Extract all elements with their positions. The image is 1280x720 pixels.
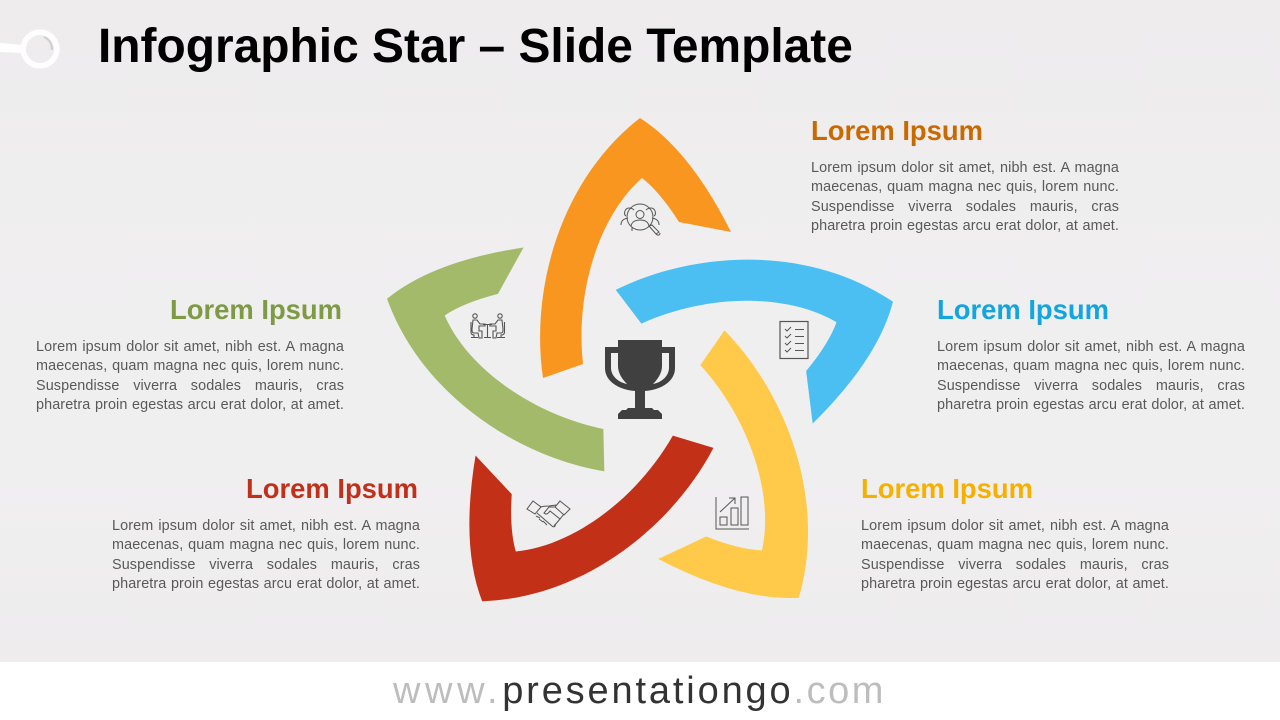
header ring ornament bbox=[0, 30, 60, 68]
body text: green: Suspendisse viverra sodales mauris, cras bbox=[36, 378, 344, 394]
text block: blue bbox=[937, 294, 1245, 413]
heading: orange: Lorem Ipsum bbox=[811, 115, 983, 146]
body text: blue: Lorem ipsum dolor sit amet, nibh est. A magna bbox=[937, 339, 1245, 355]
body text: yellow: Lorem ipsum dolor sit amet, nibh est. A magna bbox=[861, 518, 1169, 534]
icon: meeting at table bbox=[471, 314, 505, 338]
icon: people search bbox=[621, 204, 660, 235]
text block: yellow bbox=[861, 473, 1169, 592]
body text: blue: pharetra proin egestas arcu erat dolor, at amet. bbox=[937, 397, 1245, 413]
segment: green bbox=[356, 212, 662, 474]
text block: red bbox=[112, 473, 420, 592]
body text: red: maecenas, quam magna nec quis, lorem nunc. bbox=[112, 537, 420, 553]
body text: orange bbox=[811, 160, 1119, 234]
body text: yellow: Suspendisse viverra sodales mauris, cras bbox=[861, 557, 1169, 573]
body text: orange: maecenas, quam magna nec quis, lorem nunc. bbox=[811, 179, 1119, 195]
icon: handshake bbox=[527, 501, 570, 527]
body text: red: Lorem ipsum dolor sit amet, nibh est. A magna bbox=[112, 518, 420, 534]
heading: red: Lorem Ipsum bbox=[246, 473, 418, 504]
body text: red: Suspendisse viverra sodales mauris, cras bbox=[112, 557, 420, 573]
icon: trophy bbox=[605, 340, 675, 419]
body text: yellow bbox=[861, 518, 1169, 592]
body text: blue: Suspendisse viverra sodales mauris, cras bbox=[937, 378, 1245, 394]
footer website: www.presentationgo.com bbox=[393, 670, 886, 712]
heading: green: Lorem Ipsum bbox=[170, 294, 342, 325]
body text: green: Lorem ipsum dolor sit amet, nibh est. A magna bbox=[36, 339, 344, 355]
body text: green: maecenas, quam magna nec quis, lorem nunc. bbox=[36, 358, 344, 374]
body text: yellow: pharetra proin egestas arcu erat dolor, at amet. bbox=[861, 576, 1169, 592]
segment: yellow bbox=[572, 329, 880, 651]
body text: green: pharetra proin egestas arcu erat dolor, at amet. bbox=[36, 397, 344, 413]
heading: blue: Lorem Ipsum bbox=[937, 294, 1109, 325]
body text: red bbox=[112, 518, 420, 592]
body text: green bbox=[36, 339, 344, 413]
body text: blue bbox=[937, 339, 1245, 413]
segment: orange bbox=[540, 118, 731, 378]
segment: blue bbox=[615, 207, 921, 469]
icon: growth chart bbox=[716, 497, 749, 529]
body text: orange: pharetra proin egestas arcu erat dolor, at amet. bbox=[811, 218, 1119, 234]
heading: yellow: Lorem Ipsum bbox=[861, 473, 1033, 504]
body text: orange: Suspendisse viverra sodales mauris, cras bbox=[811, 199, 1119, 215]
body text: yellow: maecenas, quam magna nec quis, lorem nunc. bbox=[861, 537, 1169, 553]
title: Infographic Star – Slide Template bbox=[98, 20, 853, 73]
text block: orange bbox=[811, 115, 1119, 234]
icon: checklist bbox=[780, 322, 808, 358]
segment: red bbox=[409, 337, 716, 660]
body text: orange: Lorem ipsum dolor sit amet, nibh est. A magna bbox=[811, 160, 1119, 176]
body text: blue: maecenas, quam magna nec quis, lorem nunc. bbox=[937, 358, 1245, 374]
text block: green bbox=[36, 294, 344, 413]
body text: red: pharetra proin egestas arcu erat dolor, at amet. bbox=[112, 576, 420, 592]
